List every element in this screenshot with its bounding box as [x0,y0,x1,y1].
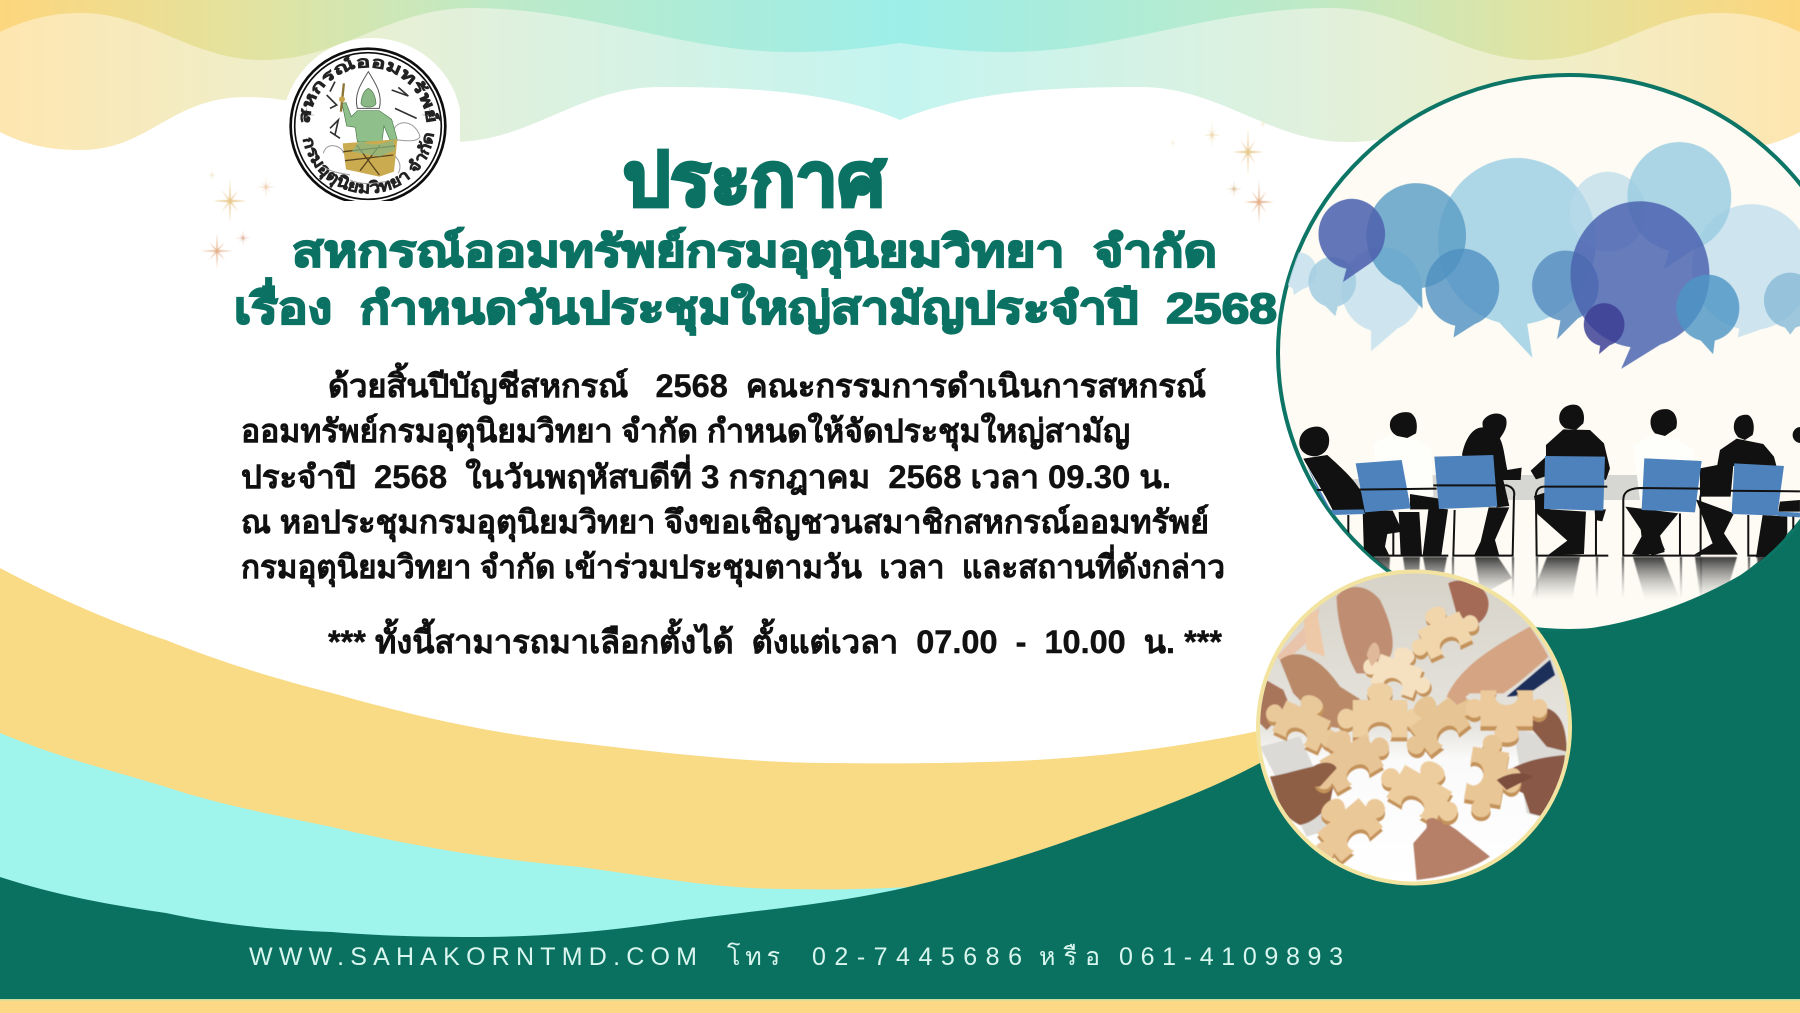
chair frames [1317,485,1800,556]
bottom wave: green band [0,490,1800,1000]
table [1350,475,1643,500]
footer contact line [249,942,1343,971]
footer contact line: WWW.SAHAKORNTMD.COM [249,943,697,971]
puzzle photo circle [1258,572,1570,884]
body text paragraph: ออมทรัพย์กรมอุตุนิยมวิทยา จำกัด กำหนดให้จัดประชุมใหญ่สามัญ [241,412,1130,452]
speech bubbles [1281,142,1800,369]
chairs [1307,455,1800,517]
footer contact line: 02-7445686 [812,943,1022,971]
subtitle: organisation name: สหกรณ์ออมทรัพย์กรมอุตุนิยมวิทยา จำกัด [292,227,1217,279]
floor reflections [1365,557,1773,600]
circle backdrop [1278,75,1800,631]
top wave: darker gradient band [0,0,1800,60]
deity figure [361,88,376,107]
side ornaments [298,106,315,124]
main meeting illustration circle [1278,75,1800,640]
lightning lines [327,82,417,138]
green corner overlapping circle [1541,534,1800,640]
photo backdrop [1258,572,1570,884]
hands [1260,581,1567,880]
bottom wave: yellow band [0,568,1300,1000]
footer contact line: 061-4109893 [1119,943,1343,971]
logo rings and emblem: กรมอุตุนิยมวิทยา จำกัด [302,133,434,194]
clouds [323,123,420,183]
meeting silhouettes [1299,405,1800,557]
logo white backing [286,38,460,142]
thumbs over pieces [1313,762,1337,788]
logo rings and emblem: สหกรณ์ออมทรัพย์ [300,54,442,123]
golden throne [343,139,397,177]
title: announcement: ประกาศ [623,138,886,221]
grey table shadow [1260,727,1570,837]
body text paragraph: ด้วยสิ้นปีบัญชีสหกรณ์ 2568 คณะกรรมการดำเนินการสหกรณ์ [328,362,1206,405]
footer contact line: โทร [727,942,780,971]
seated people [1299,405,1800,557]
body text paragraph: ณ หอประชุมกรมอุตุนิยมวิทยา จึงขอเชิญชวนสมาชิกสหกรณ์ออมทรัพย์ [241,504,1209,543]
jigsaw piece tops [1260,593,1547,872]
decorative sparkles left [201,168,276,269]
body text paragraph: กรมอุตุนิยมวิทยา จำกัด เข้าร่วมประชุมตามวัน เวลา และสถานที่ดังกล่าว [241,544,1225,588]
logo rings and emblem [289,47,447,201]
logo: cooperative seal [286,38,460,201]
white-shirted people [1404,475,1644,500]
top wave: light band [0,0,1800,150]
jigsaw piece sides [1261,597,1547,876]
halo [356,72,380,108]
bottom yellow strip [0,999,1800,1013]
decorative sparkles right [1169,118,1274,224]
subtitle: meeting subject: เรื่อง กำหนดวันประชุมใหญ่สามัญประจำปี 2568 [234,278,1277,336]
voting time note: *** ทั้งนี้สามารถมาเลือกตั้งได้ ตั้งแต่เวลา 07.00 - 10.00 น. *** [328,618,1223,660]
body text paragraph [241,362,1225,588]
body text paragraph: ประจำปี 2568 ในวันพฤหัสบดีที่ 3 กรกฎาคม 2568 เวลา 09.30 น. [241,454,1171,495]
footer contact line: หรือ [1039,943,1100,971]
bottom wave: aqua band [0,733,912,1000]
